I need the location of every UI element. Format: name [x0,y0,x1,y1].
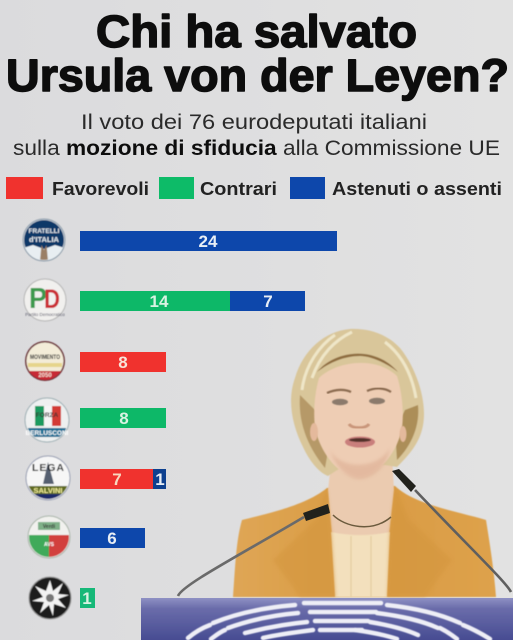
bar: Fratelli d'Italia 24: 24 [199,232,218,251]
legend: favorevoli: Favorevoli [52,178,149,199]
bar: Partito Democratico 14 and 7: 14 [150,292,169,311]
necklace [333,515,391,527]
bar: Movimento 5 Stelle 8 [80,352,166,372]
logo: Lega Salvini: SALVINI [33,486,63,495]
title [6,6,509,101]
photo: Ursula von der Leyen [141,329,513,640]
logo: Fratelli d'Italia: FRATELLI [29,228,60,235]
logo: Partito Democratico: D [44,284,60,314]
bar: Südtiroler Volkspartei 1: 1 [82,589,92,608]
subtitle [13,111,500,160]
logo: Alleanza Verdi Sinistra: AVS [44,542,55,548]
logo: Partito Democratico: P [29,283,47,315]
logo: Südtiroler Volkspartei edelweiss [29,577,71,619]
title: Chi ha salvato [96,6,417,57]
eyes [332,398,385,405]
hair [291,329,424,476]
logo: Alleanza Verdi Sinistra: Verdi [43,524,56,530]
face [314,363,403,478]
microphone right [392,469,511,592]
logo: Partito Democratico [24,279,66,321]
bar: Partito Democratico 14 and 7: 7 [263,292,273,311]
bar: Alleanza Verdi Sinistra 6 [80,528,145,548]
mouth [345,436,375,448]
nose [349,424,369,428]
legend [6,177,502,199]
bar: Südtiroler Volkspartei 1 [80,588,95,608]
podium [141,598,513,640]
eyebrows [327,388,391,393]
subtitle: sulla mozione di sfiducia alla Commissione UE [13,137,500,160]
logo: Movimento 5 Stelle: 2050 [38,373,52,379]
bar: Forza Italia 8: 8 [119,409,129,428]
legend: contrari [159,177,277,199]
bar: Alleanza Verdi Sinistra 6: 6 [107,529,117,548]
logo: Forza Italia: BERLUSCONI [26,430,69,437]
blouse [331,532,390,597]
title: Ursula von der Leyen? [6,50,509,101]
jacket lapels [273,486,452,597]
logo: Lega Salvini [26,456,70,502]
bar: Forza Italia 8 [80,408,166,428]
jacket [233,486,496,597]
neck [328,455,394,536]
logo: Lega Salvini: LEGA [32,462,64,474]
blouse fold [351,536,371,597]
bar: Partito Democratico 14 and 7 [80,291,305,311]
bar: Lega 7 and 1 [80,469,166,489]
logo: Forza Italia: FORZA [36,412,58,419]
logo: Fratelli d'Italia [23,219,65,261]
bar: Movimento 5 Stelle 8: 8 [118,353,128,372]
logo: Fratelli d'Italia: d'ITALIA [29,235,60,244]
legend: contrari: Contrari [200,178,277,199]
legend: favorevoli [6,177,149,199]
bar: Lega 7 and 1: 7 [112,470,122,489]
bar: Lega 7 and 1: 1 [155,470,165,489]
logo: Alleanza Verdi Sinistra [28,516,70,558]
parliament hemicycle emblem [188,603,490,639]
subtitle: Il voto dei 76 eurodeputati italiani [81,111,427,134]
microphone left [178,504,330,596]
ears [310,423,406,442]
logo: Forza Italia [25,398,69,442]
cheek shading [330,448,390,479]
logo: Movimento 5 Stelle [25,341,65,383]
bar: Fratelli d'Italia 24 [80,231,337,251]
logo: Partito Democratico: Partito Democratico [25,312,65,317]
logo: Movimento 5 Stelle: MOVIMENTO [30,354,60,361]
legend: astenuti o assenti: Astenuti o assenti [332,178,502,199]
